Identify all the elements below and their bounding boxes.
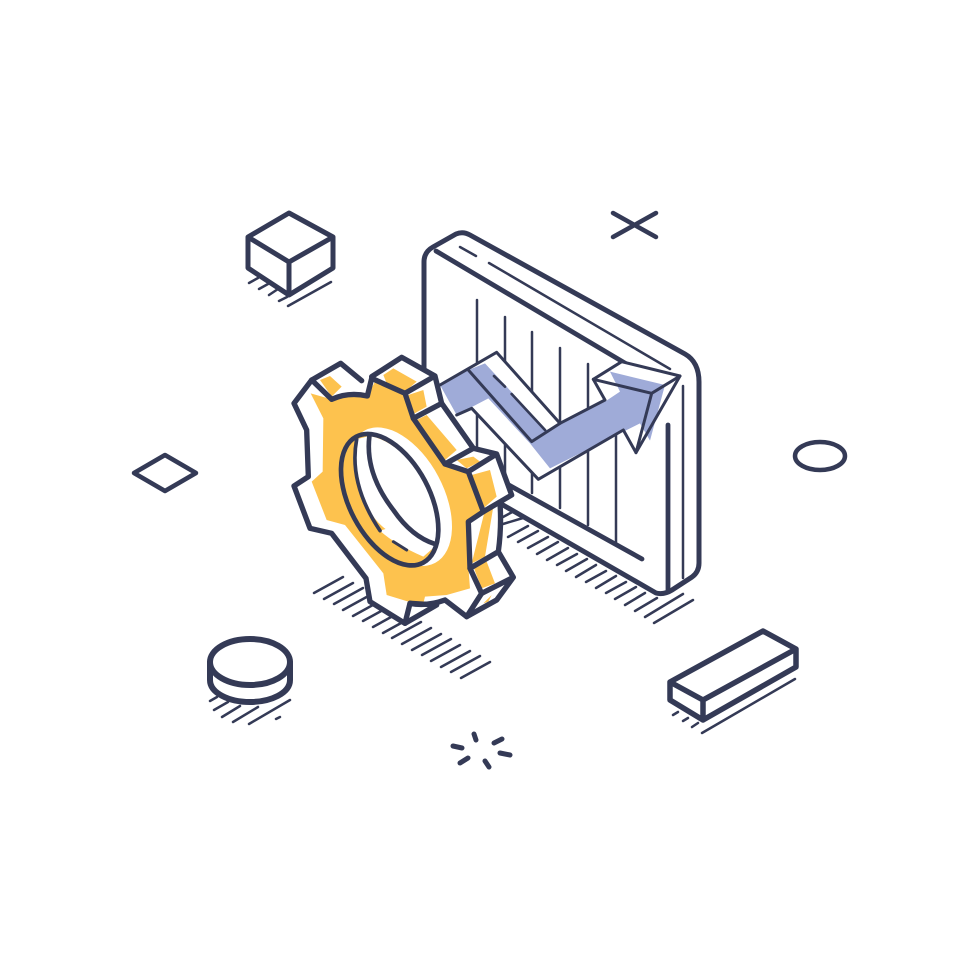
gear white silhouette (294, 357, 513, 623)
cube body (248, 213, 333, 295)
gear bottom edge (405, 603, 437, 623)
block body (670, 631, 796, 720)
chart panel (424, 233, 699, 594)
panel top detail lines (460, 247, 670, 369)
icon: diamond (134, 455, 196, 491)
gear top teeth (312, 357, 473, 448)
gear hole inner white (353, 436, 438, 544)
gear hole rim white lower (380, 527, 437, 557)
arrow blue fill (440, 363, 665, 468)
gear white highlight ring (327, 410, 473, 583)
gear (294, 357, 513, 623)
panel body (424, 233, 699, 594)
block shadow (673, 679, 795, 733)
gear front outline (294, 378, 483, 623)
panel top bevel line (436, 251, 640, 372)
gear yellow side patches (320, 368, 497, 603)
icon: cross (613, 213, 656, 237)
coin top (210, 639, 290, 685)
gear hole (321, 418, 458, 581)
panel baseline (507, 484, 642, 559)
gear hole inner arcs (355, 439, 380, 531)
arrow dash details (494, 376, 545, 430)
arrow white body (440, 352, 680, 479)
gear yellow face (311, 382, 482, 603)
shadow hatch: gear (314, 577, 490, 678)
panel right edge lines (666, 425, 670, 590)
arrow outline (440, 352, 680, 479)
growth arrow (440, 352, 680, 479)
coin shadow (210, 697, 290, 724)
shadow hatch: chart panel (503, 510, 693, 623)
block (670, 631, 796, 733)
chart bars (477, 300, 616, 542)
coin body (210, 662, 290, 702)
coin (210, 639, 290, 724)
arrow inner edges (468, 370, 680, 453)
cube (248, 213, 333, 306)
cube shadow (249, 278, 331, 306)
icon: oval (795, 442, 845, 470)
icon: sparkle dashes (453, 734, 510, 767)
gear right teeth (445, 448, 513, 617)
gear hole outline (321, 418, 458, 581)
